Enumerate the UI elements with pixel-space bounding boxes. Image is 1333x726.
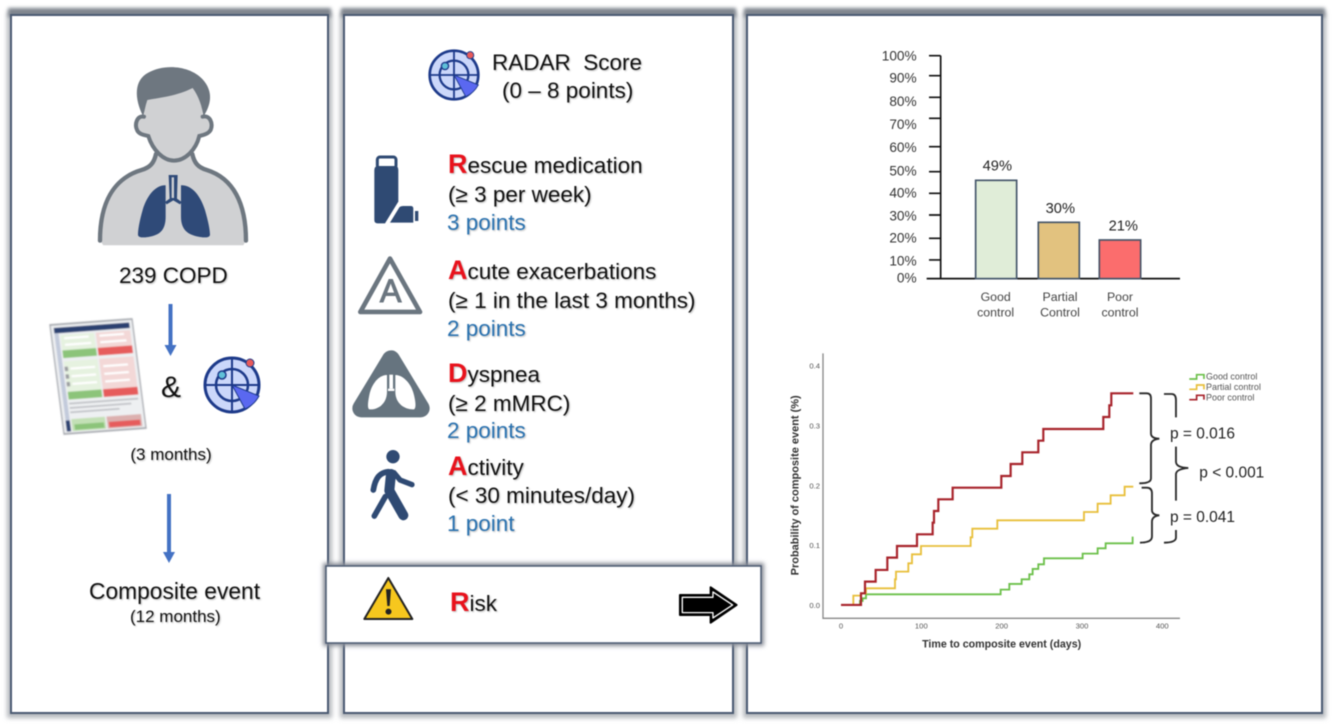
item: rescue medication: 3 points: [447, 210, 526, 235]
icon: walking person: [373, 450, 412, 516]
category labels: control: [1101, 305, 1138, 319]
label: 3 months: (3 months): [130, 445, 212, 464]
axis tick labels: 0.1: [809, 541, 820, 550]
value labels: [983, 158, 1138, 234]
middle block: [64, 359, 102, 400]
heading: RADAR score: RADAR Score: [492, 50, 642, 75]
bar chart: control distribution: [882, 49, 1180, 319]
item: activity: 1 point: [447, 511, 515, 536]
brackets: comparisons: [1139, 393, 1188, 543]
legend: [1189, 372, 1261, 402]
panel: results: [743, 8, 1326, 718]
legend: Good control: [1206, 372, 1257, 382]
axis tick labels: 0.2: [809, 481, 820, 490]
y axis labels: [882, 49, 917, 286]
y axis labels: 50%: [889, 163, 917, 178]
item: rescue medication: [447, 149, 643, 235]
panel: cohort: [7, 8, 332, 718]
y axis labels: 70%: [889, 117, 917, 132]
p values: p = 0.016: [1170, 426, 1235, 443]
item: acute exacerbations: [447, 255, 695, 341]
category labels: control: [977, 305, 1014, 319]
y axis labels: 40%: [889, 186, 917, 201]
notes: [69, 398, 138, 404]
curve: poor control: [841, 393, 1133, 605]
p values: p < 0.001: [1199, 465, 1264, 482]
icon: acute exacerbation triangle: [360, 259, 420, 312]
y axis labels: 80%: [889, 94, 917, 109]
axis tick labels: 0.4: [809, 362, 821, 371]
axis tick labels: 400: [1156, 622, 1169, 631]
axis tick labels: 300: [1076, 622, 1088, 631]
item: dyspnea: (≥ 2 mMRC): [448, 391, 570, 416]
value labels: 49%: [983, 158, 1012, 174]
category labels: Poor: [1107, 290, 1133, 304]
panel: risk callout: [323, 563, 764, 646]
bars: [976, 180, 1141, 279]
arrow: COPD to assessment: [164, 304, 176, 356]
ampersand: &: [161, 371, 181, 404]
curve: good control: [841, 537, 1133, 605]
upper block: [60, 333, 97, 358]
item: dyspnea: Dyspnea: [448, 358, 541, 388]
item: activity: [447, 451, 635, 536]
legend: Partial control: [1206, 382, 1261, 392]
label: 12 months: (12 months): [130, 607, 221, 626]
axis tick labels: 0: [839, 622, 843, 631]
subheading: point range: (0 – 8 points): [502, 78, 633, 103]
category labels: Control: [1040, 305, 1080, 319]
category labels: Good: [981, 290, 1011, 304]
icon: acute exacerbation triangle: A: [380, 273, 402, 309]
axes: [927, 56, 1180, 279]
axis tick labels: 200: [995, 622, 1008, 631]
item: acute exacerbations: 2 points: [447, 316, 526, 341]
y axis labels: 20%: [889, 231, 917, 246]
icon: warning triangle: [364, 578, 412, 619]
item: dyspnea: [447, 358, 570, 443]
icon: radar: [205, 358, 259, 412]
label: composite event: Composite event: [89, 578, 261, 604]
item: activity: Activity: [448, 451, 524, 481]
icon: dyspnea lungs: [361, 359, 421, 409]
x axis title: Time to composite event (days): [922, 639, 1082, 651]
arrow: risk to results: [680, 587, 737, 623]
panel: RADAR score: [340, 8, 737, 718]
y axis title: Probability of composite event (%): [789, 395, 801, 575]
y axis labels: 10%: [889, 253, 917, 268]
arrow: assessment to composite event: [163, 494, 175, 563]
heading: 239 COPD: 239 COPD: [119, 263, 228, 288]
category labels: [977, 290, 1138, 319]
icon: radar small: [430, 51, 478, 99]
value labels: 21%: [1109, 218, 1138, 234]
curve: partial control: [841, 487, 1133, 605]
item: acute exacerbations: Acute exacerbations: [448, 255, 656, 285]
y axis labels: 90%: [889, 71, 917, 86]
icon: inhaler: [374, 157, 418, 223]
p values: p = 0.041: [1170, 509, 1235, 526]
p values: [1170, 426, 1264, 526]
label: risk: Risk: [450, 587, 498, 617]
line chart: cumulative probability of composite event: [789, 353, 1264, 651]
axis tick labels: 0.3: [809, 422, 820, 431]
y axis labels: 100%: [882, 49, 917, 64]
y axis labels: 60%: [889, 140, 917, 155]
item: acute exacerbations: (≥ 1 in the last 3 months): [448, 288, 695, 313]
icon: patient with lungs: [100, 67, 246, 245]
y axis labels: 0%: [897, 271, 917, 286]
item: activity: (< 30 minutes/day): [448, 483, 635, 508]
legend: Poor control: [1206, 392, 1254, 402]
axis tick labels: 0.0: [809, 601, 820, 610]
chart axes: [823, 353, 1180, 618]
axis tick labels: [809, 362, 1169, 631]
axis tick labels: 100: [915, 622, 928, 631]
y axis labels: 30%: [889, 208, 917, 223]
icon: questionnaire sheet: [50, 319, 146, 434]
lower block: [71, 417, 106, 431]
item: dyspnea: 2 points: [447, 418, 526, 443]
item: rescue medication: Rescue medication: [448, 149, 643, 179]
item: rescue medication: (≥ 3 per week): [448, 182, 592, 207]
category labels: Partial: [1043, 290, 1077, 304]
value labels: 30%: [1046, 201, 1075, 217]
